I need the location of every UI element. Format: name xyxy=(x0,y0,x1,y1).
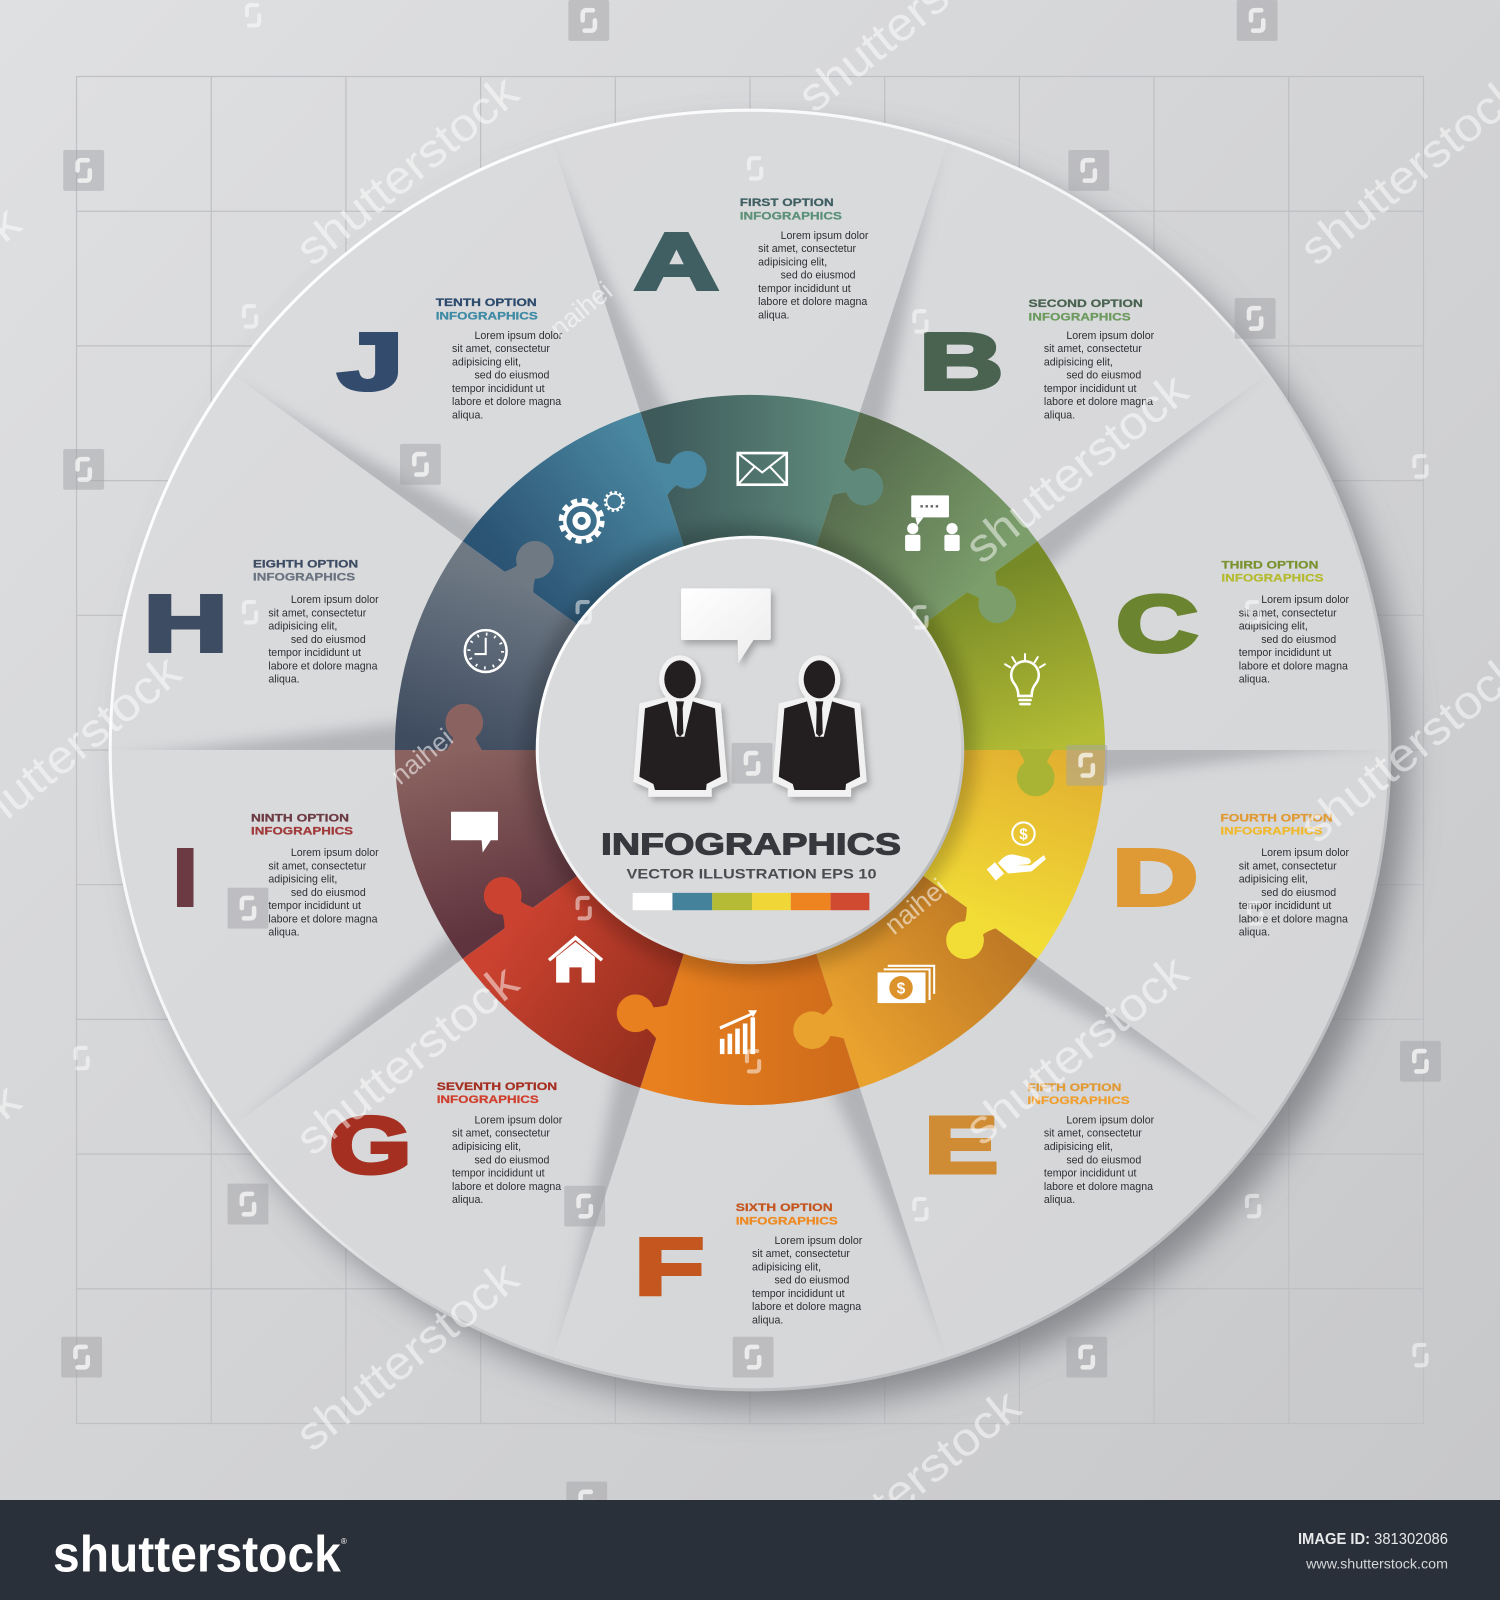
body F: Lorem ipsum dolor xyxy=(774,1235,863,1247)
body G: aliqua. xyxy=(452,1194,483,1206)
centre disc xyxy=(537,537,963,963)
subtitle: VECTOR ILLUSTRATION EPS 10 xyxy=(627,866,877,882)
wheel drop shadow xyxy=(129,129,1408,1408)
icon: chat persons xyxy=(905,495,960,551)
watermark text: shutterstock xyxy=(286,955,528,1165)
letter H: H xyxy=(144,579,228,668)
body B: sed do eiusmod xyxy=(1066,370,1141,382)
subheading B: INFOGRAPHICS xyxy=(1029,311,1131,323)
subheading G: INFOGRAPHICS xyxy=(437,1094,539,1106)
body F: sit amet, consectetur xyxy=(752,1248,850,1260)
icon: clock xyxy=(465,630,507,672)
body G: Lorem ipsum dolor xyxy=(474,1114,563,1126)
subheading F: INFOGRAPHICS xyxy=(736,1215,838,1227)
body G: sed do eiusmod xyxy=(474,1154,549,1166)
watermark text: shutterstock xyxy=(955,944,1198,1155)
watermark text: shutterstock xyxy=(788,1379,1030,1589)
panel E xyxy=(924,1082,1155,1206)
registered mark: ® xyxy=(341,1537,347,1546)
body H: sed do eiusmod xyxy=(291,634,366,646)
ring segment B xyxy=(773,398,1047,661)
body B: aliqua. xyxy=(1044,409,1075,421)
heading D: FOURTH OPTION xyxy=(1220,812,1333,824)
subheading C: INFOGRAPHICS xyxy=(1221,573,1323,585)
letter J: J xyxy=(338,317,403,406)
letter A: A xyxy=(635,217,718,306)
ring inner shadow from disc xyxy=(523,523,977,977)
footer bar xyxy=(0,1500,1500,1600)
body C: sed do eiusmod xyxy=(1261,634,1336,646)
panel C xyxy=(1116,559,1350,686)
subheading J: INFOGRAPHICS xyxy=(436,310,538,322)
body G: labore et dolore magna xyxy=(452,1181,561,1193)
body H: Lorem ipsum dolor xyxy=(291,594,379,606)
heading C: THIRD OPTION xyxy=(1221,559,1319,571)
body A: tempor incididunt ut xyxy=(758,283,851,295)
body I: tempor incididunt ut xyxy=(268,900,361,912)
website: www.shutterstock.com xyxy=(1305,1556,1448,1572)
panel H xyxy=(144,558,379,686)
letter G: G xyxy=(330,1100,411,1189)
title: INFOGRAPHICS xyxy=(601,828,901,862)
body B: labore et dolore magna xyxy=(1044,396,1153,408)
footer logo: shutterstock xyxy=(53,1525,341,1582)
body J: labore et dolore magna xyxy=(452,396,561,408)
watermark text: naihei xyxy=(544,276,618,343)
letter F: F xyxy=(635,1222,704,1311)
panel I xyxy=(173,812,379,939)
body I: sed do eiusmod xyxy=(291,887,366,899)
heading J: TENTH OPTION xyxy=(436,297,537,309)
body C: sit amet, consectetur xyxy=(1239,607,1337,619)
body A: Lorem ipsum dolor xyxy=(781,230,869,242)
body B: Lorem ipsum dolor xyxy=(1066,330,1155,342)
icon: banknotes: $ xyxy=(897,980,906,997)
body C: labore et dolore magna xyxy=(1239,660,1348,672)
body I: adipisicing elit, xyxy=(268,874,337,886)
panel F xyxy=(635,1202,863,1326)
body I: labore et dolore magna xyxy=(268,913,378,925)
ring segment G xyxy=(453,839,727,1102)
heading A: FIRST OPTION xyxy=(740,197,834,209)
body J: Lorem ipsum dolor xyxy=(474,330,563,342)
body D: labore et dolore magna xyxy=(1239,913,1348,925)
ring segment A xyxy=(640,395,860,561)
body F: aliqua. xyxy=(752,1314,783,1326)
body D: adipisicing elit, xyxy=(1239,874,1308,886)
body B: tempor incididunt ut xyxy=(1044,383,1137,395)
subheading A: INFOGRAPHICS xyxy=(740,210,842,222)
icon: house xyxy=(549,938,602,983)
body I: aliqua. xyxy=(268,927,300,939)
image id: IMAGE ID: 381302086 xyxy=(1298,1531,1448,1548)
puzzle tabs xyxy=(445,446,1055,1054)
ring segment F xyxy=(640,939,860,1105)
watermark text: shutterstock xyxy=(286,65,528,275)
body D: sit amet, consectetur xyxy=(1239,860,1337,872)
watermark text: shutterstock xyxy=(955,363,1198,573)
heading G: SEVENTH OPTION xyxy=(437,1081,557,1093)
body I: sit amet, consectetur xyxy=(268,860,367,872)
body D: aliqua. xyxy=(1239,927,1270,939)
letter I: I xyxy=(173,833,197,922)
panel G xyxy=(330,1081,563,1206)
body H: labore et dolore magna xyxy=(268,660,378,672)
body C: adipisicing elit, xyxy=(1239,621,1308,633)
body G: sit amet, consectetur xyxy=(452,1128,550,1140)
body E: adipisicing elit, xyxy=(1044,1141,1113,1153)
letter D: D xyxy=(1112,833,1198,922)
colour bar xyxy=(633,893,869,910)
body E: Lorem ipsum dolor xyxy=(1066,1114,1155,1126)
heading I: NINTH OPTION xyxy=(251,812,349,824)
ring segment H xyxy=(378,536,604,796)
icon: light bulb xyxy=(1005,654,1045,704)
body J: adipisicing elit, xyxy=(452,356,521,368)
body A: adipisicing elit, xyxy=(758,256,827,268)
body E: labore et dolore magna xyxy=(1044,1181,1153,1193)
panel A xyxy=(635,197,869,321)
body C: Lorem ipsum dolor xyxy=(1261,594,1350,606)
heading F: SIXTH OPTION xyxy=(736,1202,833,1214)
panel D xyxy=(1112,812,1350,939)
body A: sed do eiusmod xyxy=(781,270,856,282)
heading H: EIGHTH OPTION xyxy=(253,558,358,570)
body D: Lorem ipsum dolor xyxy=(1261,847,1350,859)
body A: sit amet, consectetur xyxy=(758,243,857,255)
body C: aliqua. xyxy=(1239,674,1270,686)
ring segment E xyxy=(773,839,1047,1102)
ring segment J xyxy=(453,398,727,661)
body F: labore et dolore magna xyxy=(752,1301,861,1313)
body E: tempor incididunt ut xyxy=(1044,1168,1137,1180)
body C: tempor incididunt ut xyxy=(1239,647,1331,659)
body E: sit amet, consectetur xyxy=(1044,1128,1142,1140)
subheading H: INFOGRAPHICS xyxy=(253,572,355,584)
body J: sit amet, consectetur xyxy=(452,343,550,355)
body E: sed do eiusmod xyxy=(1066,1154,1141,1166)
body A: labore et dolore magna xyxy=(758,296,867,308)
heading B: SECOND OPTION xyxy=(1029,298,1143,310)
body G: tempor incididunt ut xyxy=(452,1168,545,1180)
body A: aliqua. xyxy=(758,309,789,321)
subheading E: INFOGRAPHICS xyxy=(1028,1095,1130,1107)
subheading I: INFOGRAPHICS xyxy=(251,826,353,838)
ring segment D xyxy=(896,704,1122,964)
body H: sit amet, consectetur xyxy=(268,607,367,619)
body F: sed do eiusmod xyxy=(774,1275,849,1287)
body B: adipisicing elit, xyxy=(1044,356,1113,368)
heading E: FIFTH OPTION xyxy=(1028,1082,1122,1094)
body I: Lorem ipsum dolor xyxy=(291,847,379,859)
letter E: E xyxy=(924,1100,998,1189)
watermark text: naihei xyxy=(879,873,953,940)
icon: hand with coin xyxy=(987,822,1046,881)
body J: aliqua. xyxy=(452,409,483,421)
panel B xyxy=(919,298,1155,421)
icon: envelope xyxy=(738,453,787,485)
icon: banknotes xyxy=(878,966,934,1003)
watermark text: naihei xyxy=(385,723,459,790)
letter B: B xyxy=(919,317,1003,406)
body E: aliqua. xyxy=(1044,1194,1075,1206)
body D: sed do eiusmod xyxy=(1261,887,1336,899)
icon: speech bubble small xyxy=(451,812,498,853)
body B: sit amet, consectetur xyxy=(1044,343,1142,355)
letter C: C xyxy=(1116,579,1198,668)
body J: sed do eiusmod xyxy=(474,370,549,382)
watermark text: shutterstock xyxy=(286,1251,528,1461)
body H: tempor incididunt ut xyxy=(268,647,361,659)
body F: tempor incididunt ut xyxy=(752,1288,845,1300)
icon: bar chart with arrow xyxy=(719,1010,757,1054)
ring segment C xyxy=(896,536,1122,796)
subheading D: INFOGRAPHICS xyxy=(1220,826,1322,838)
icon: gears xyxy=(561,492,623,541)
outer wheel with ten panels xyxy=(86,110,1414,1390)
icon: hand with coin: $ xyxy=(1019,826,1028,843)
icon: businessman left xyxy=(633,655,727,797)
panel J xyxy=(338,297,563,421)
body D: tempor incididunt ut xyxy=(1239,900,1331,912)
body G: adipisicing elit, xyxy=(452,1141,521,1153)
icon: speech bubble xyxy=(681,588,771,663)
puzzle ring xyxy=(378,395,1122,1105)
body H: aliqua. xyxy=(268,674,300,686)
icon: businessman right xyxy=(773,655,867,797)
ring segment I xyxy=(378,704,604,964)
body F: adipisicing elit, xyxy=(752,1261,821,1273)
body H: adipisicing elit, xyxy=(268,621,337,633)
body J: tempor incididunt ut xyxy=(452,383,545,395)
